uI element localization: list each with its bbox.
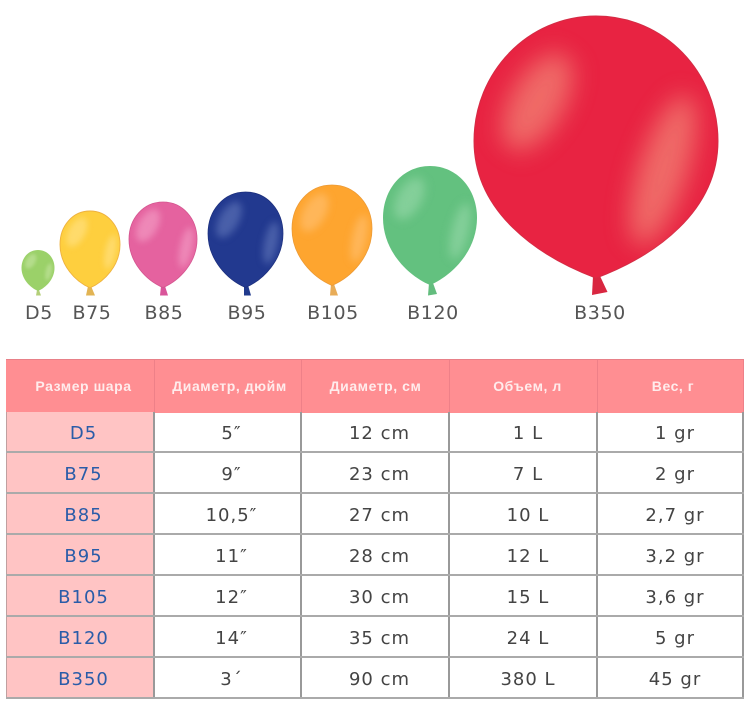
balloon: D5 green — [22, 250, 54, 296]
row: B95: 11″ — [215, 546, 248, 567]
row: B350: 45 gr — [649, 669, 701, 690]
size table — [6, 359, 744, 700]
row: B75: B75 — [64, 464, 103, 485]
row: B85 — [6, 494, 744, 535]
row: B75: 7 L — [513, 464, 543, 485]
row: B85: 10 L — [507, 505, 549, 526]
row: B95: B95 — [64, 546, 103, 567]
balloon size labels: B95 — [227, 302, 267, 324]
row: B85: 2,7 gr — [645, 505, 705, 526]
table header: Размер шара — [35, 378, 132, 394]
row: B85: B85 — [64, 505, 103, 526]
row: D5: 1 gr — [655, 423, 695, 444]
row: B105 — [6, 576, 744, 617]
row: B120: 35 cm — [349, 628, 410, 649]
row: D5 — [6, 412, 744, 453]
row: B75: 9″ — [221, 464, 242, 485]
row: B350: 3´ — [220, 669, 243, 690]
row: B105: 30 cm — [349, 587, 410, 608]
balloon: B350 red — [474, 16, 718, 295]
row: B95: 3,2 gr — [645, 546, 705, 567]
balloon size labels: B350 — [574, 302, 626, 324]
table header — [6, 359, 744, 413]
row: B120 — [6, 617, 744, 658]
row: B75: 2 gr — [655, 464, 695, 485]
balloons illustration — [22, 16, 718, 324]
balloon: B120 green — [383, 166, 477, 296]
balloon: B95 navy — [208, 192, 283, 296]
table header: Вес, г — [652, 378, 694, 394]
row: B350: B350 — [58, 669, 109, 690]
balloon size labels: B120 — [407, 302, 459, 324]
balloon size labels: B75 — [72, 302, 112, 324]
row: B350: 380 L — [500, 669, 556, 690]
balloon size labels: D5 — [25, 302, 53, 324]
row: B350 — [6, 658, 744, 699]
row: B105: 3,6 gr — [645, 587, 705, 608]
balloon size labels — [25, 302, 626, 324]
row: B120: 14″ — [215, 628, 248, 649]
row: D5: 1 L — [513, 423, 543, 444]
balloon: B85 pink — [129, 202, 197, 296]
row: B120: 24 L — [507, 628, 549, 649]
row: B95: 28 cm — [349, 546, 410, 567]
table header: Объем, л — [493, 378, 562, 394]
row: B120: B120 — [58, 628, 109, 649]
row: B95: 12 L — [507, 546, 549, 567]
balloon size labels: B105 — [307, 302, 359, 324]
balloon: B75 yellow — [60, 211, 120, 296]
row: B75: 23 cm — [349, 464, 410, 485]
row: B75 — [6, 453, 744, 494]
row: D5: D5 — [70, 423, 97, 444]
table header: Диаметр, см — [330, 378, 421, 394]
row: D5: 12 cm — [349, 423, 410, 444]
row: B105: 15 L — [507, 587, 549, 608]
balloon size labels: B85 — [144, 302, 184, 324]
row: B85: 10,5″ — [206, 505, 257, 526]
row: B350: 90 cm — [349, 669, 410, 690]
balloon: B105 orange — [292, 185, 372, 296]
row: B105: B105 — [58, 587, 109, 608]
row: B95 — [6, 535, 744, 576]
row: B120: 5 gr — [655, 628, 695, 649]
row: B105: 12″ — [215, 587, 248, 608]
row: B85: 27 cm — [349, 505, 410, 526]
table header: Диаметр, дюйм — [172, 378, 287, 394]
row: D5: 5″ — [221, 423, 242, 444]
